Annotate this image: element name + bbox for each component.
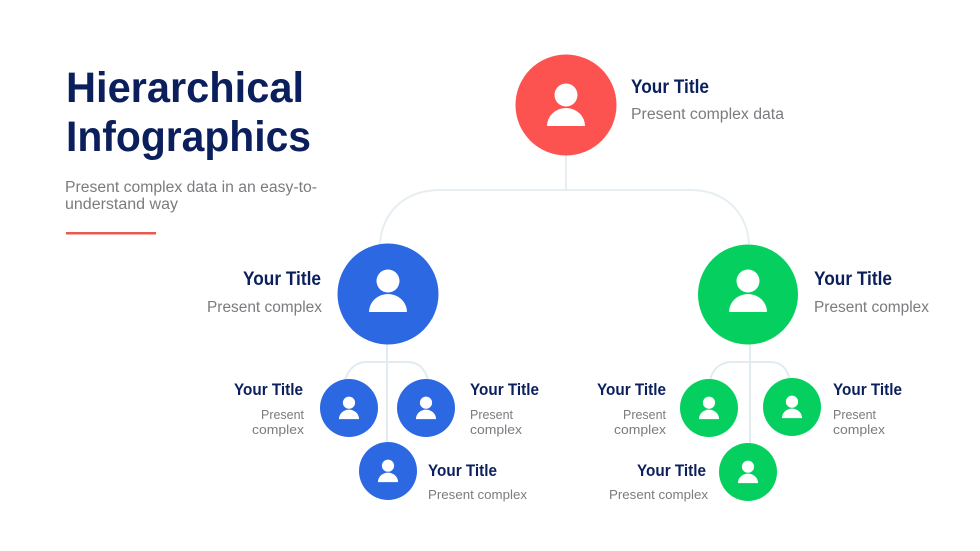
label: blue child right: Your Title: [470, 380, 539, 399]
label: green level two: [814, 269, 929, 316]
node: green child right: [763, 378, 821, 436]
accent underline: [66, 232, 156, 234]
subtitle: understand way: [65, 196, 178, 213]
title: Infographics: [66, 113, 311, 161]
label: blue child right: Present: [470, 407, 513, 422]
connector: top level tree: [380, 155, 749, 244]
label: root: Present complex data: [631, 106, 784, 123]
label: green level two: Present complex: [814, 299, 929, 316]
label: blue level two: Your Title: [243, 269, 321, 290]
icon: person: [547, 84, 585, 126]
icon: person: [339, 397, 359, 419]
node: green level two: [698, 244, 798, 344]
icon: person: [369, 270, 407, 312]
label: green child left: complex: [614, 422, 667, 437]
label: blue child bottom: Your Title: [428, 461, 497, 480]
node: blue child left: [320, 379, 378, 437]
node: blue child right: [397, 379, 455, 437]
icon: person: [699, 397, 719, 419]
label: blue child left: complex: [252, 422, 305, 437]
label: green child right: complex: [833, 422, 886, 437]
label: green child right: [833, 380, 902, 437]
label: green child right: Your Title: [833, 380, 902, 399]
label: green child left: [597, 380, 667, 437]
title: Hierarchical: [66, 64, 304, 112]
label: blue child right: complex: [470, 422, 523, 437]
label: green child bottom: Your Title: [637, 461, 706, 480]
icon: person: [738, 461, 758, 483]
label: green child bottom: [609, 461, 709, 502]
subtitle: Present complex data in an easy-to-: [65, 179, 317, 196]
label: blue child right: [470, 380, 539, 437]
icon: person: [416, 397, 436, 419]
label: blue child left: Your Title: [234, 380, 303, 399]
label: green child left: Your Title: [597, 380, 666, 399]
label: blue child bottom: [428, 461, 528, 502]
label: root: [631, 77, 784, 123]
label: green child bottom: Present complex: [609, 487, 709, 502]
node: green child bottom: [719, 443, 777, 501]
label: blue child bottom: Present complex: [428, 487, 528, 502]
node: green child left: [680, 379, 738, 437]
label: green child left: Present: [623, 407, 666, 422]
label: blue child left: [234, 380, 305, 437]
node: root red: [516, 54, 616, 156]
label: blue level two: Present complex: [207, 299, 322, 316]
label: green child right: Present: [833, 407, 876, 422]
title: [66, 64, 311, 161]
node: blue child bottom: [359, 442, 417, 500]
icon: person: [782, 396, 802, 418]
icon: person: [378, 460, 398, 482]
icon: person: [729, 270, 767, 312]
label: green level two: Your Title: [814, 269, 892, 290]
label: blue child left: Present: [261, 407, 304, 422]
label: root: Your Title: [631, 77, 709, 98]
subtitle: [65, 179, 317, 213]
label: blue level two: [207, 269, 322, 316]
connector: blue branch: [345, 344, 428, 442]
connector: green branch: [710, 344, 790, 443]
node: blue level two: [338, 244, 438, 344]
